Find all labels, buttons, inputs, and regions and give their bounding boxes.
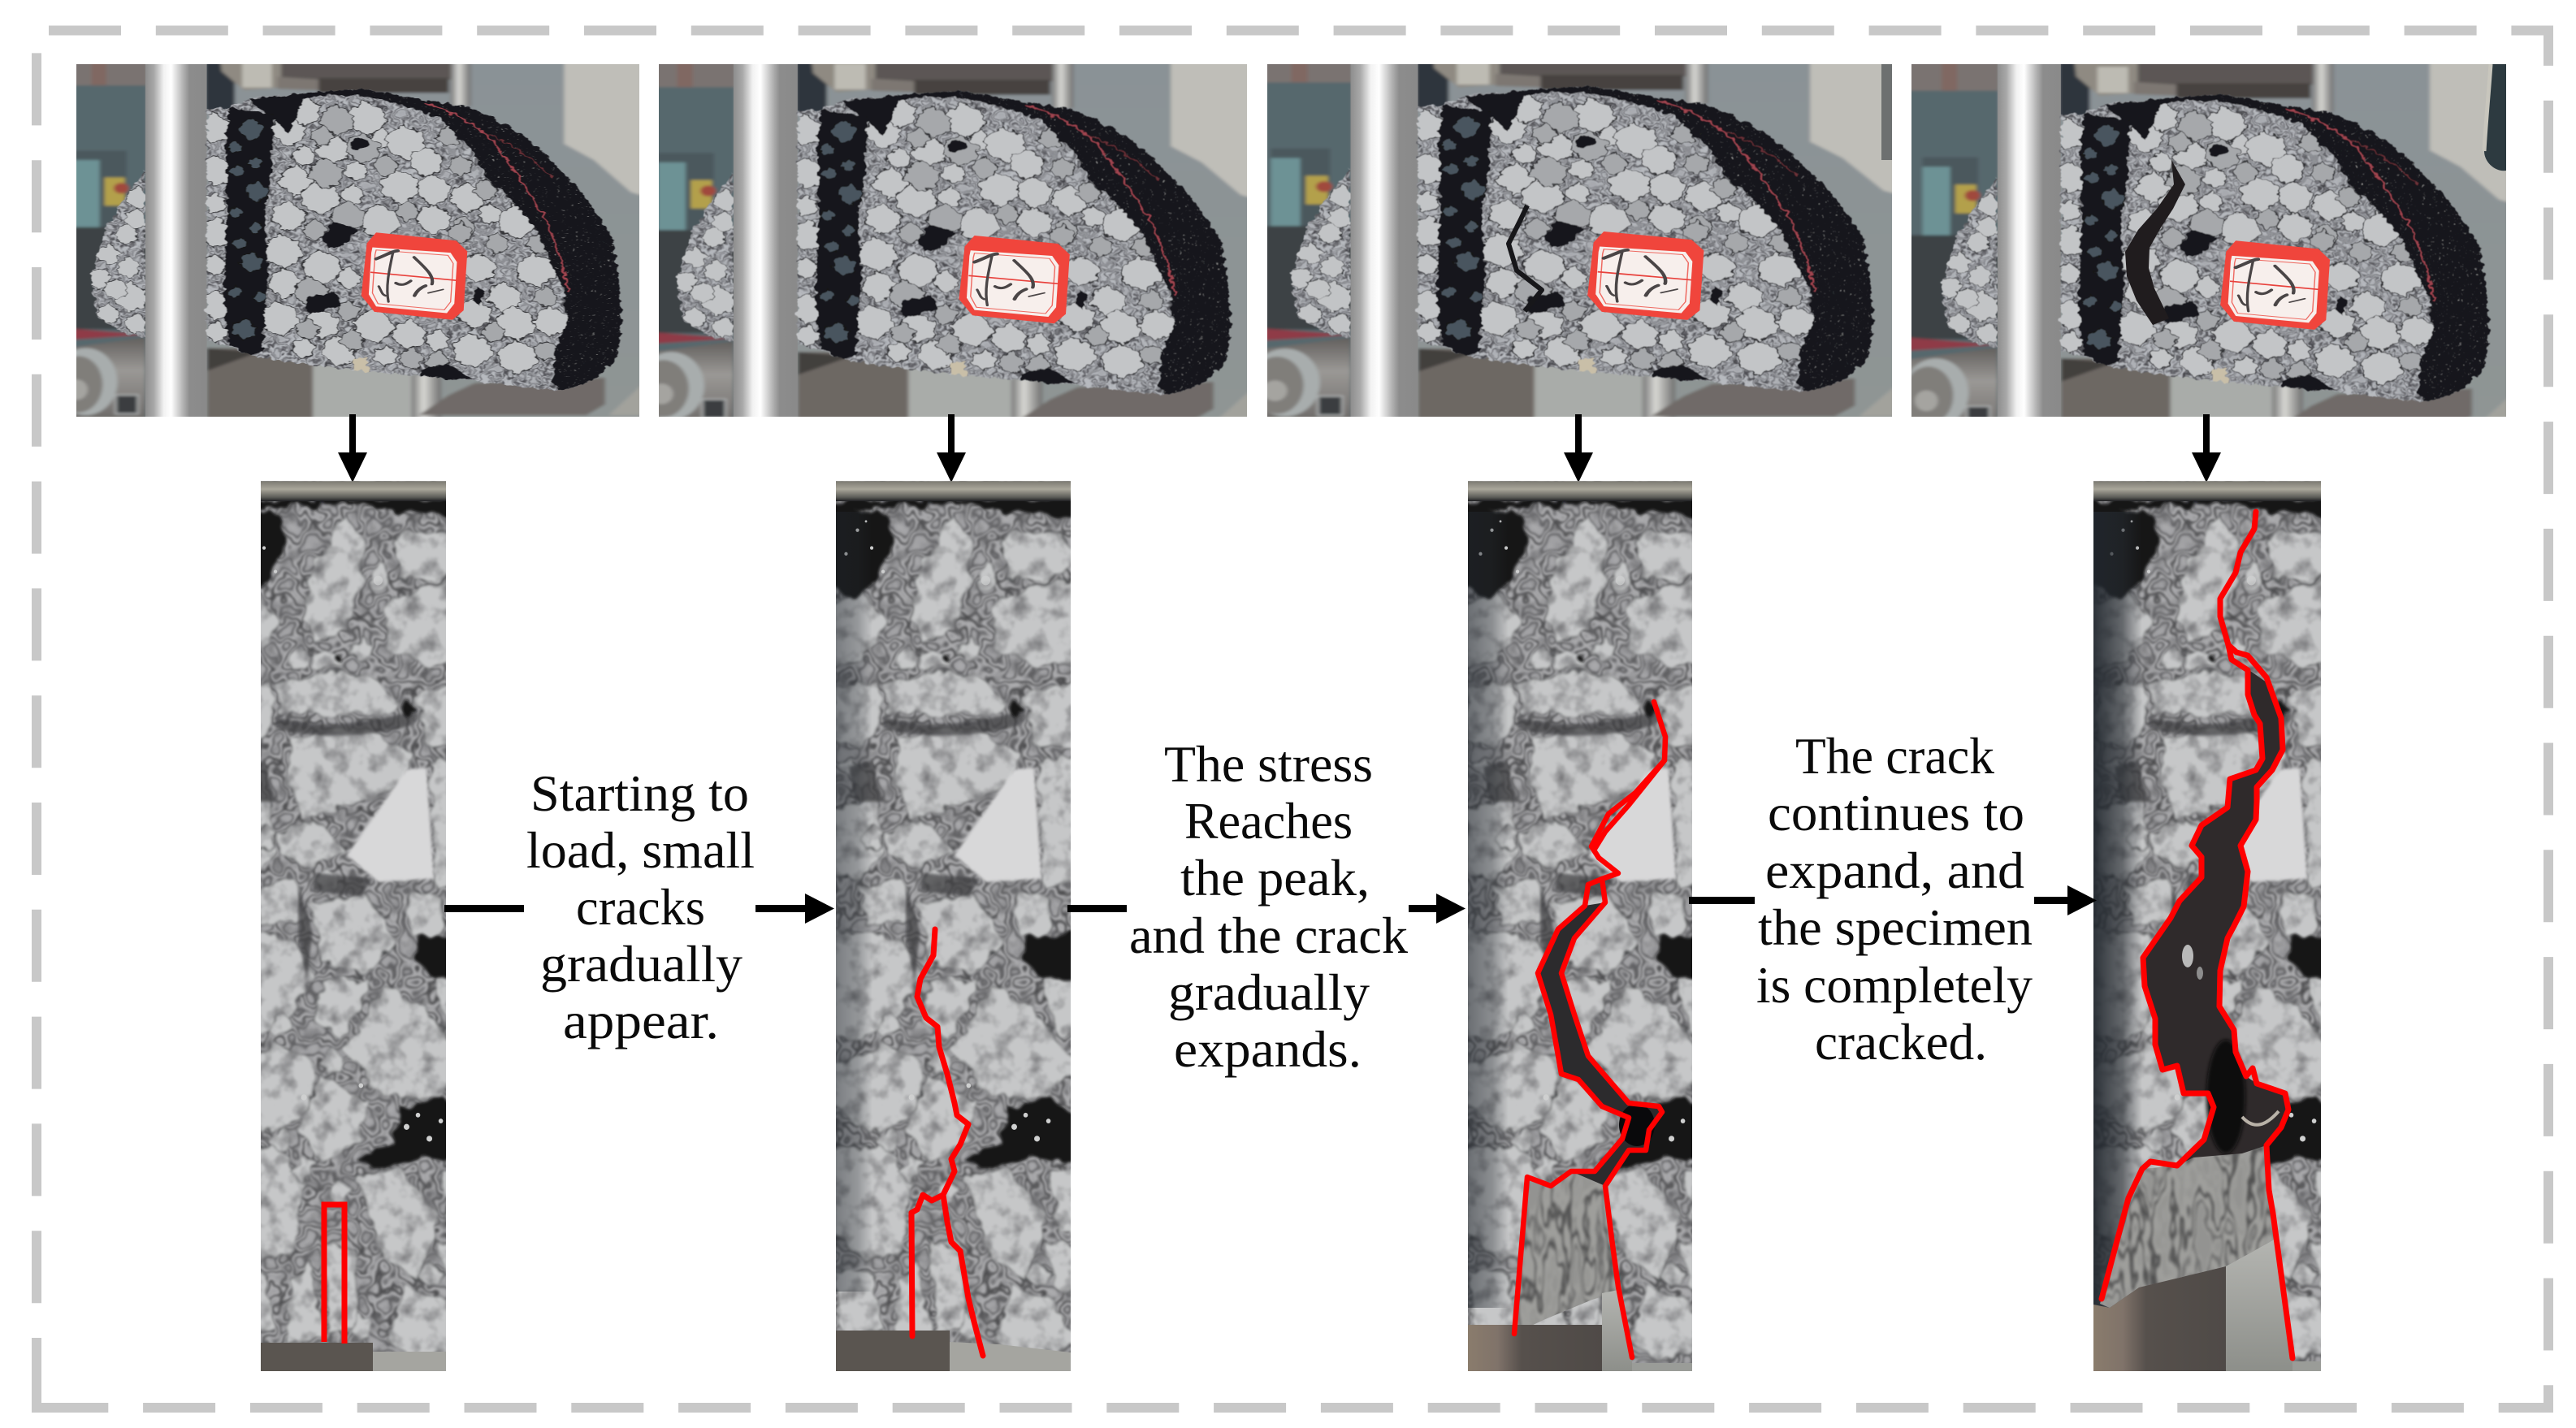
photo 2: specimen with first small cracks — [659, 64, 1247, 417]
text: stage two description: Reaches — [1184, 793, 1353, 850]
text: stage three description: The crack — [1795, 728, 1994, 785]
text: stage three description: expand, and — [1765, 842, 2024, 899]
photo 4: specimen completely cracked — [1911, 64, 2506, 417]
arrow: photo 3 down to strip 3 — [1564, 414, 1593, 482]
strip 4: side view, specimen fully cracked — [2093, 481, 2321, 1371]
text: stage one description — [526, 765, 755, 1049]
text: stage one description: Starting to — [530, 765, 749, 822]
strip 2: side view with thin crack — [836, 481, 1071, 1371]
text: stage two description — [1129, 736, 1409, 1078]
text: stage two description: gradually — [1168, 964, 1370, 1021]
text: stage one description: load, small — [526, 822, 755, 879]
text: stage three description: continues to — [1768, 785, 2024, 842]
text: stage one description: appear. — [563, 993, 719, 1049]
connector: strip 3 to strip 4 — [1689, 885, 2097, 915]
text: stage two description: The stress — [1164, 736, 1373, 793]
text: stage two description: expands. — [1174, 1021, 1362, 1078]
strip 3: side view with widening crack — [1468, 481, 1692, 1371]
connector: strip 2 to strip 3 — [1067, 894, 1466, 924]
text: stage three description — [1756, 728, 2033, 1071]
photo 3: specimen at peak stress with a visible crack — [1267, 64, 1892, 417]
photo 1: specimen in the loading rig, before loading — [76, 64, 639, 417]
strip 1: side view with initial crack — [261, 481, 446, 1371]
arrow: photo 1 down to strip 1 — [338, 414, 367, 482]
connector: strip 1 to strip 2 — [444, 894, 834, 924]
text: stage three description: cracked. — [1815, 1014, 1987, 1071]
text: stage three description: the specimen — [1758, 899, 2033, 956]
text: stage one description: cracks — [576, 879, 705, 936]
arrow: photo 2 down to strip 2 — [937, 414, 966, 482]
arrow: photo 4 down to strip 4 — [2192, 414, 2221, 482]
text: stage two description: and the crack — [1129, 907, 1409, 964]
text: stage one description: gradually — [540, 936, 743, 993]
text: stage three description: is completely — [1756, 957, 2033, 1014]
text: stage two description: the peak, — [1180, 850, 1370, 907]
